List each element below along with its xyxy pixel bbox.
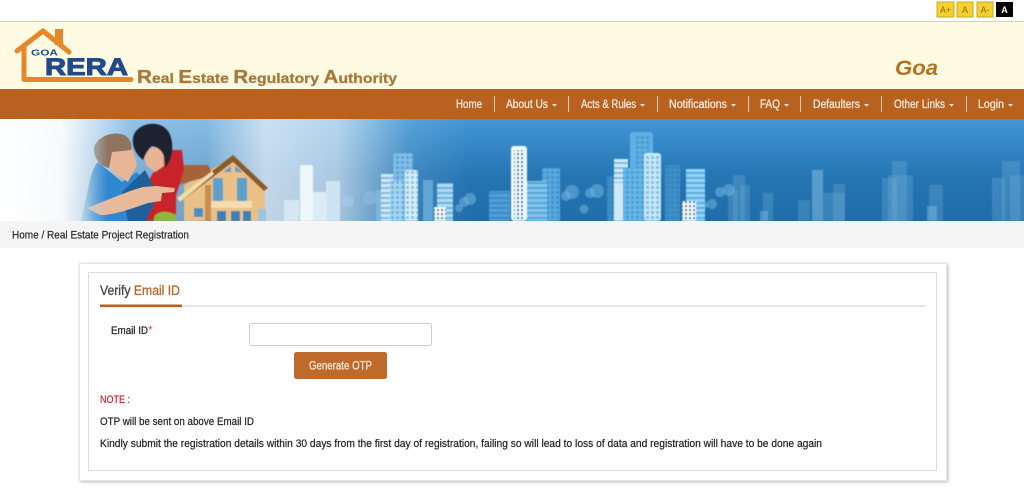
- authority title: Real Estate Regulatory Authority: [137, 66, 397, 87]
- illustration: house: [177, 155, 268, 221]
- icon: house outline: [17, 31, 131, 80]
- RERA wordmark: RERA: [45, 54, 128, 81]
- breadcrumb bar: Home / Real Estate Project Registration: [12, 230, 189, 242]
- navigation bar: [0, 89, 1024, 119]
- note heading: NOTE :: [100, 394, 130, 406]
- font size controls: A-: [980, 5, 990, 15]
- generate otp button: [294, 352, 387, 379]
- navigation bar: FAQ: [760, 99, 780, 111]
- GOA wordmark: GOA: [31, 48, 58, 58]
- pale skyline left: [284, 153, 453, 221]
- navigation bar: Login: [978, 99, 1004, 111]
- header band: [0, 21, 1024, 89]
- note line 2: Kindly submit the registration details within 30 days from the first day of registration, failing so will lead to loss of data and registration will have to be done again: [100, 438, 822, 450]
- illustration: woman: [133, 124, 184, 221]
- clouds: [342, 184, 735, 214]
- font size controls: [937, 2, 1013, 17]
- generate otp button: Generate OTP: [309, 360, 372, 372]
- navigation bar: About Us: [506, 99, 548, 111]
- font size controls: A: [962, 5, 968, 15]
- heading underline: [100, 304, 926, 307]
- icon: chimney: [55, 29, 63, 45]
- panel: verify email form: [80, 264, 946, 480]
- navigation bar: Acts & Rules: [581, 99, 636, 111]
- state name: Goa: [895, 57, 938, 80]
- email label: Email ID: [111, 325, 148, 337]
- navigation bar: Defaulters: [813, 99, 860, 111]
- email input: [250, 324, 432, 346]
- font size controls: A: [1001, 5, 1008, 15]
- form heading: Verify Email ID: [100, 283, 180, 298]
- breadcrumb bar: [0, 221, 1024, 248]
- inner card: [88, 272, 936, 470]
- navigation bar: Notifications: [669, 99, 727, 111]
- required mark: *: [148, 323, 153, 337]
- outer card: [80, 264, 946, 480]
- hero banner: [0, 119, 1024, 221]
- note line 1: OTP will be sent on above Email ID: [100, 416, 254, 428]
- navigation bar: Other Links: [894, 99, 945, 111]
- faint skyline right: [728, 161, 1024, 221]
- navigation bar: Home: [456, 99, 482, 111]
- font size controls: A+: [940, 5, 951, 15]
- illustration: man: [80, 133, 175, 221]
- logo: Goa RERA: [17, 29, 131, 81]
- bright skyline centre: [489, 132, 705, 221]
